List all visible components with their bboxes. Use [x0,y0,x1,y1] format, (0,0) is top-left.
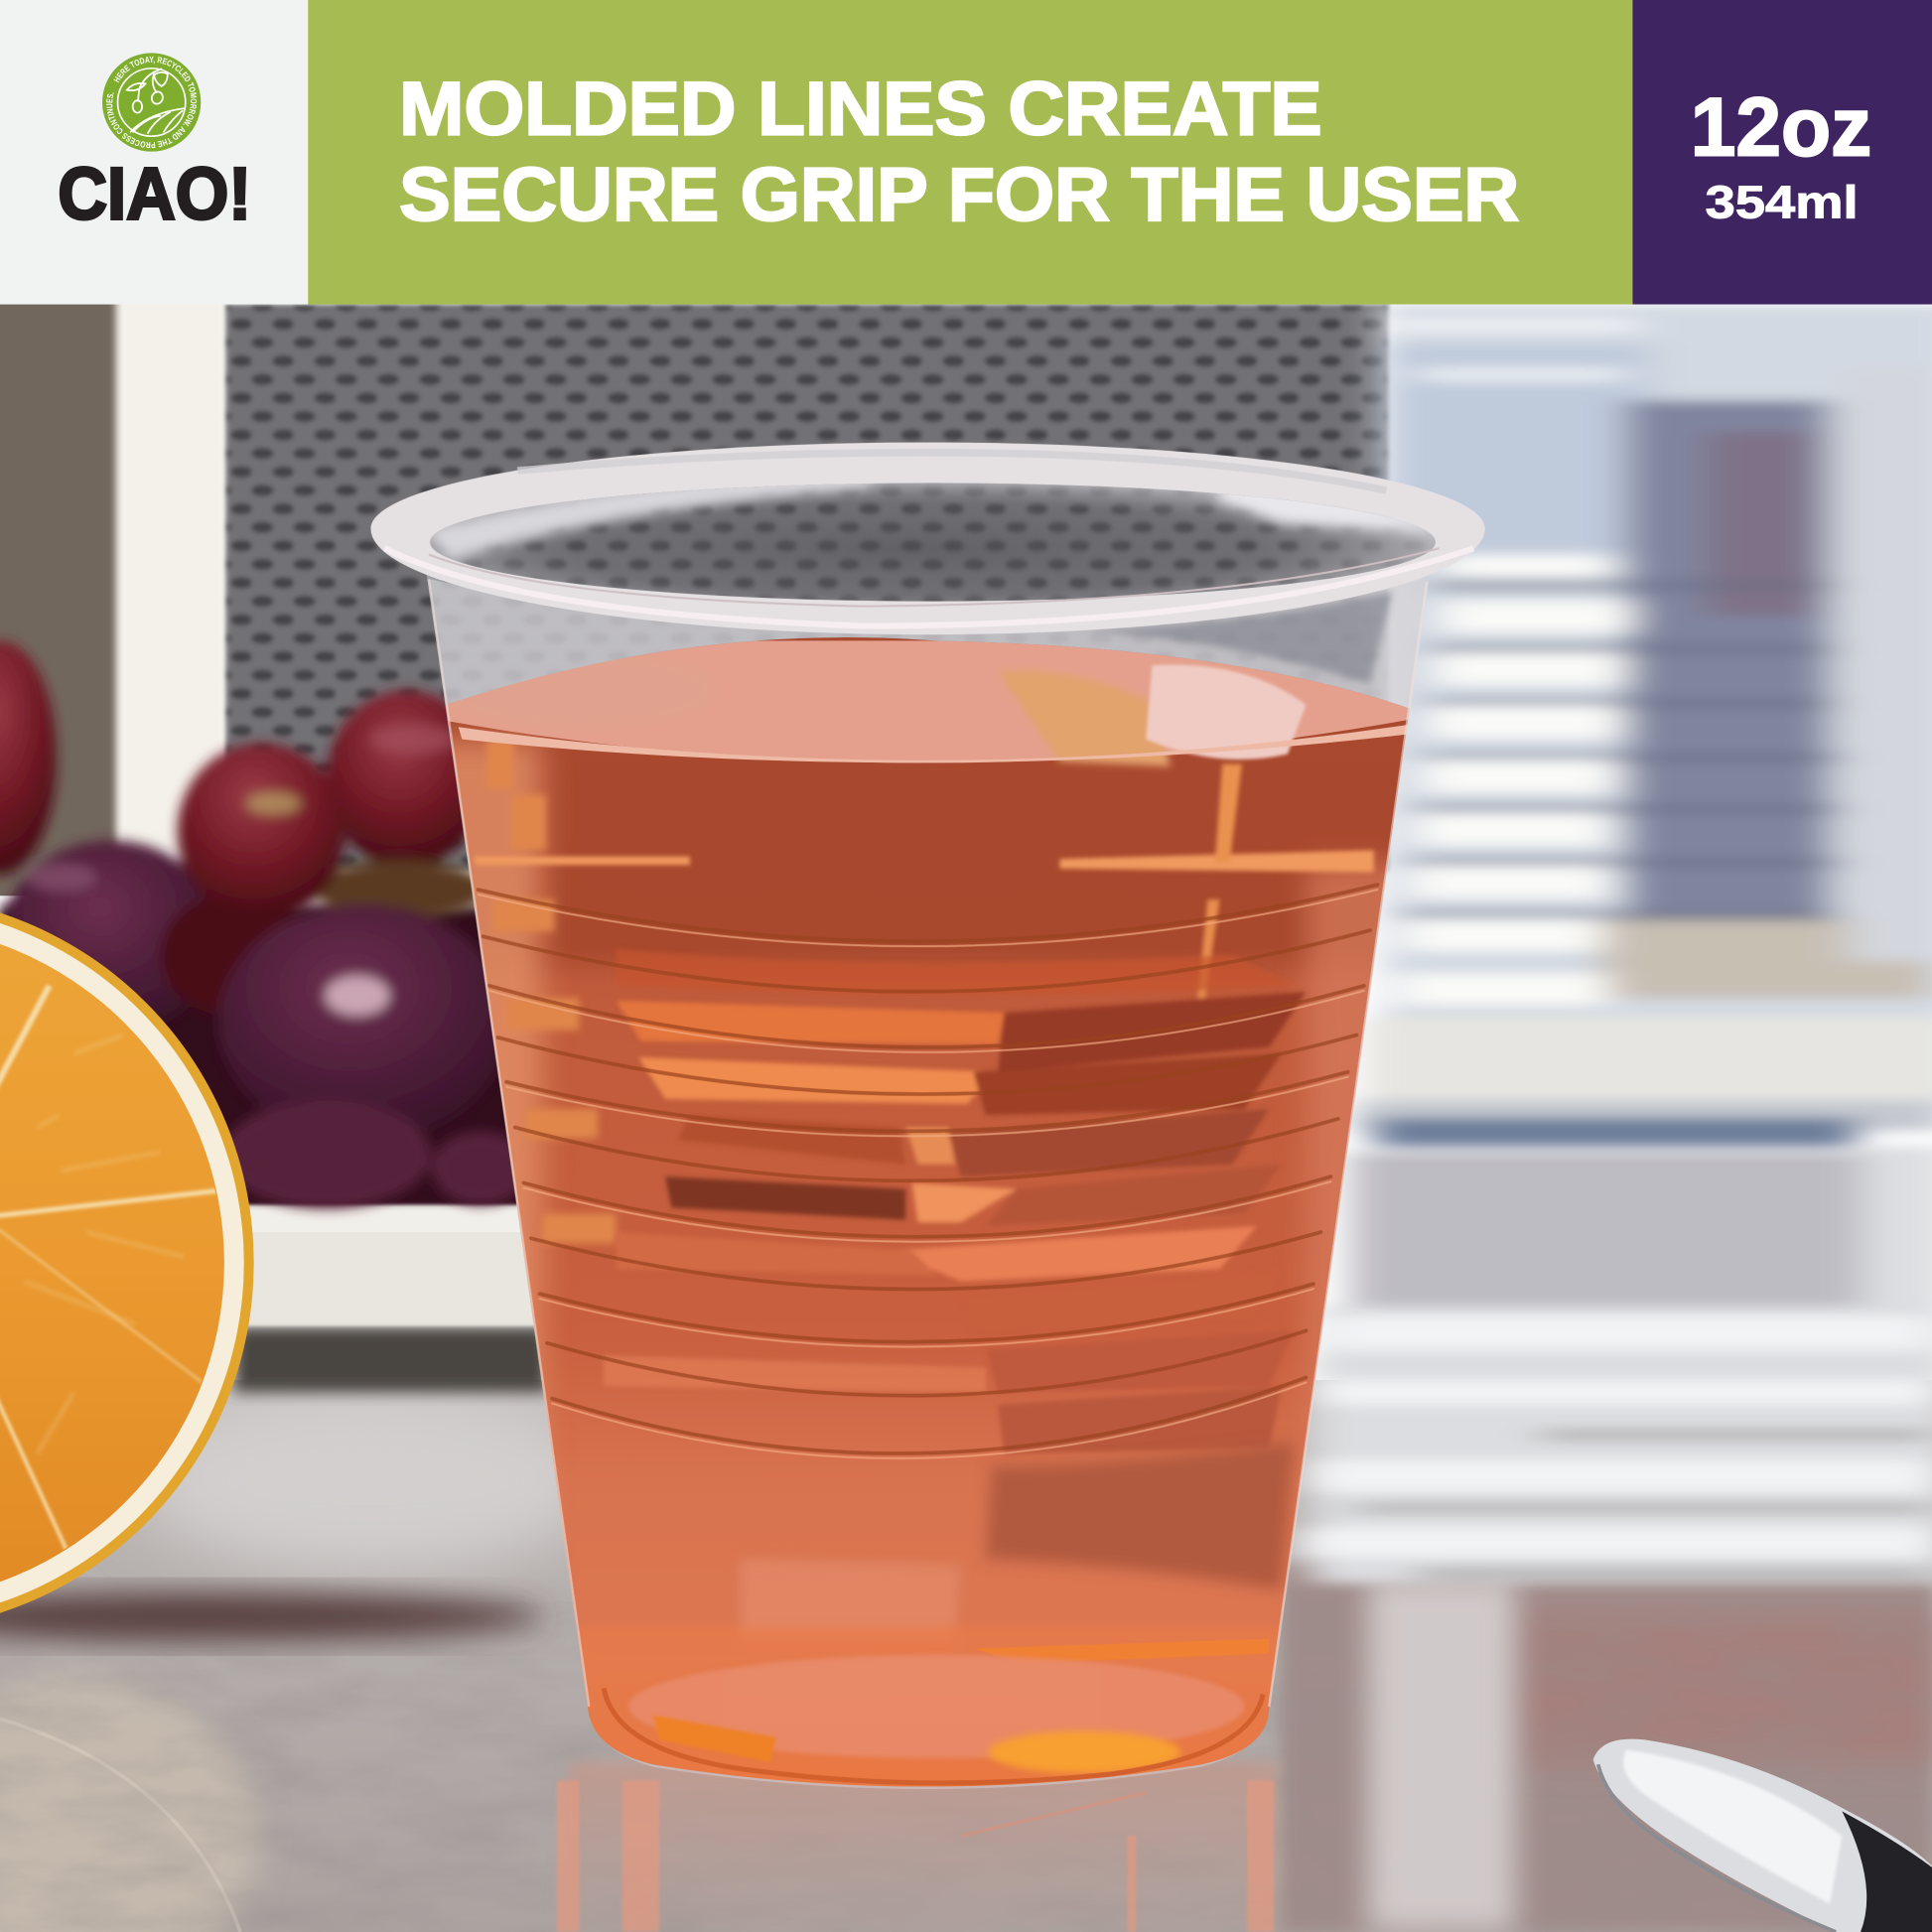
spoon [1593,1739,1932,1932]
logo branch and olives [127,69,184,133]
cup shadow and reflection on table [554,1762,1284,1932]
title line 2: SECURE GRIP FOR THE USER [399,153,1519,237]
lower body shadow [986,1442,1294,1589]
orange half [0,895,254,1631]
logo ring text: HERE TODAY, RECYCLED TOMORROW. AND THE PROCESS CONTINUES. [106,56,197,149]
marble veining [0,1678,590,1929]
size in millilitres: 354ml [1706,177,1859,228]
size in ounces: 12oz [1691,80,1871,173]
logo badge [102,53,201,152]
wall: taupe panel [0,305,123,896]
grape shadow base [0,905,542,1213]
bottom glow [579,1626,1282,1799]
molded grip ribs [479,885,1378,1458]
table: marble surface [0,1380,1932,1932]
cups stack: blurred background [1300,305,1932,1584]
liquid colour patches [475,763,1374,1453]
white window frame [116,296,224,853]
header: title band [308,0,1632,305]
grapes [0,640,530,1208]
liquid: orange drink [419,628,1442,1811]
logo wordmark: CIAO! [58,152,251,234]
cup [370,443,1485,1811]
plate [234,1205,548,1392]
header: size panel [1632,0,1932,305]
liquid surface [438,640,1423,766]
orange segment lines [0,986,221,1553]
cup glass body [426,573,1430,1789]
left side refraction [486,740,617,1243]
cup glass wall above liquid [429,579,1427,1707]
mesh backdrop [224,305,1389,871]
title line 1: MOLDED LINES CREATE [399,67,1322,151]
header: logo panel [0,0,308,305]
cup interior seen through opening [419,469,1448,610]
cup rim [370,443,1485,634]
